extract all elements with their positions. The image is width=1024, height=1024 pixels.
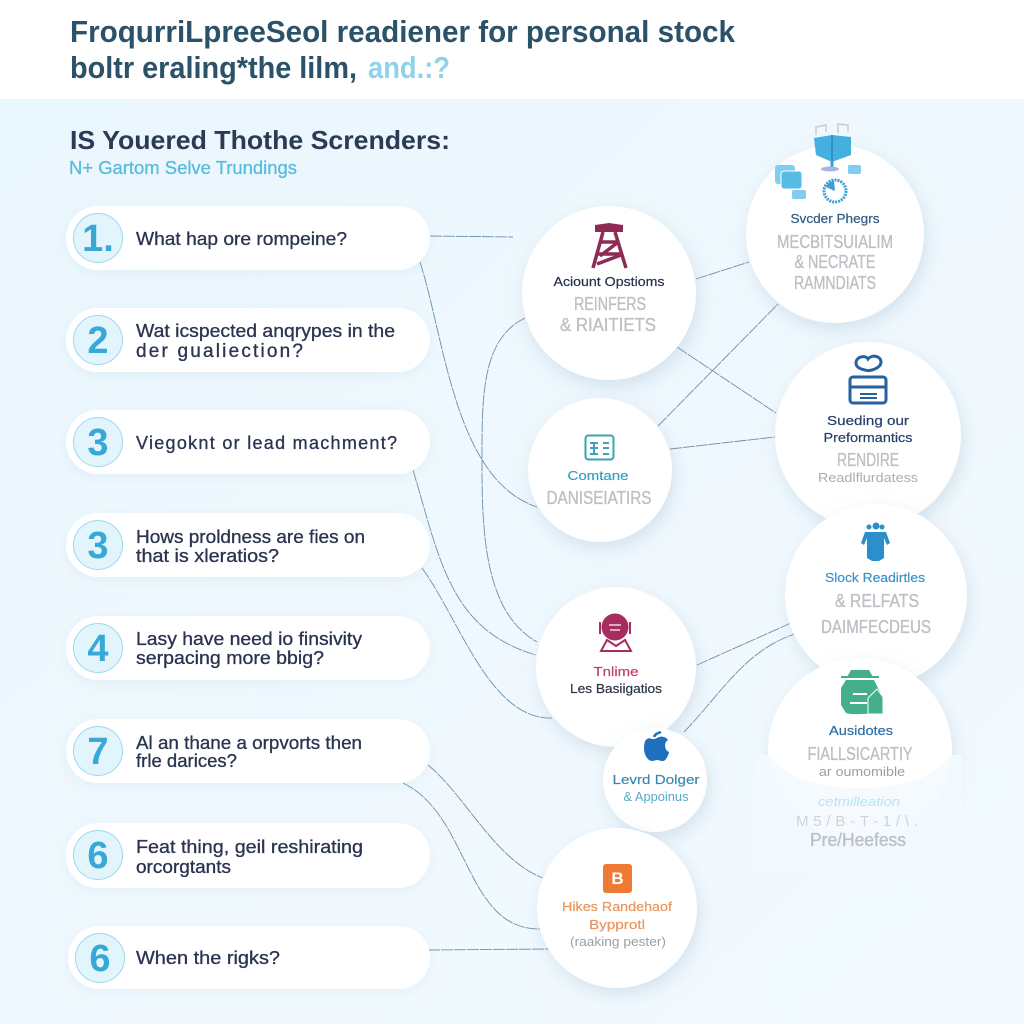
panel: ausidotes: ar oumomible	[819, 764, 905, 779]
question 6: frle darices?	[136, 751, 237, 771]
panel: comtane	[528, 398, 672, 542]
panel: slock readirtles	[785, 504, 967, 686]
panel: faded note card: cetmilleation	[818, 794, 900, 809]
question 3	[66, 410, 430, 474]
panel: levrd dolger: & Appoinus	[624, 789, 689, 804]
panel: account options: REINFERS	[574, 294, 646, 314]
panel: account options: & RIAITIETS	[560, 315, 656, 335]
panel: trime: Les Basiigatios	[570, 681, 663, 696]
question 3: Viegoknt or lead machment?	[136, 433, 397, 453]
panel: svcder phegrs	[746, 124, 924, 323]
panel: comtane: Comtane	[568, 468, 628, 483]
panel: sueding our preformantics: Readlflurdatess	[818, 470, 919, 485]
panel: hikes randehaof	[537, 828, 697, 988]
question 6: 7	[87, 731, 109, 773]
question 7: orcorgtants	[136, 857, 231, 877]
panel: account options	[522, 206, 696, 380]
question 7	[66, 823, 430, 888]
icon: tower	[593, 223, 626, 268]
title	[0, 0, 1024, 99]
question 3: 3	[87, 422, 109, 464]
question 2: der gualiection?	[136, 341, 303, 362]
panel: svcder phegrs: MECBITSUIALIM	[777, 232, 893, 252]
question 5	[66, 616, 430, 680]
panel: question rows	[66, 206, 430, 989]
question 5: Lasy have need io finsivity	[136, 629, 362, 649]
question 4	[66, 513, 430, 577]
panel: hikes randehaof: (raaking pester)	[570, 934, 666, 949]
panel: comtane: DANISEIATIRS	[546, 488, 652, 508]
question 7: 6	[87, 835, 109, 877]
question 2: 2	[87, 320, 109, 362]
panel: svcder phegrs: Svcder Phegrs	[790, 211, 880, 226]
icon: orange badge: B	[611, 869, 624, 888]
panel: svcder phegrs: & NECRATE	[794, 252, 876, 272]
panel: sueding our preformantics: Sueding our	[827, 413, 910, 428]
panel: ausidotes: FIALLSICARTIY	[808, 744, 912, 764]
icon: head badge	[600, 614, 631, 651]
panel: sueding our preformantics	[775, 342, 961, 528]
question 6: Al an thane a orpvorts then	[136, 733, 362, 753]
panel: ausidotes	[754, 658, 962, 870]
icon: apple	[644, 732, 669, 761]
question 1: 1.	[82, 218, 114, 260]
title: and.:?	[368, 50, 450, 85]
icon: data board	[586, 436, 614, 460]
panel: faded note card	[754, 712, 962, 870]
question 1: What hap ore rompeine?	[136, 229, 347, 249]
icon: person	[861, 522, 890, 561]
question 1	[66, 206, 430, 270]
subheading: N+ Gartom Selve Trundings	[69, 158, 297, 178]
question 2	[66, 308, 430, 372]
panel: sueding our preformantics: RENDIRE	[837, 450, 899, 470]
icon: green house bag	[841, 670, 883, 714]
question 8: 6	[89, 938, 111, 980]
icon: monitor and chat cluster	[775, 124, 861, 202]
question 6	[66, 719, 430, 783]
panel: slock readirtles: Slock Readirtles	[825, 570, 926, 585]
question 7: Feat thing, geil reshirating	[136, 837, 363, 857]
icon: orange badge	[603, 864, 632, 893]
panel: trime	[536, 587, 696, 747]
question 4: that is xleratios?	[136, 546, 279, 566]
panel: ausidotes: Ausidotes	[829, 723, 894, 738]
connector lines	[403, 236, 795, 950]
question 4: 3	[87, 525, 109, 567]
heading: IS Youered Thothe Screnders:	[70, 125, 450, 155]
panel: levrd dolger	[603, 728, 707, 832]
panel: levrd dolger: Levrd Dolger	[612, 772, 700, 787]
title: boltr eraling*the lilm,	[70, 50, 357, 85]
panel: account options: Aciount Opstioms	[554, 274, 665, 289]
panel: faded note card: M5/B-T-1/\.	[796, 813, 918, 830]
question 5: serpacing more bbig?	[136, 648, 324, 668]
question 8: When the rigks?	[136, 948, 280, 968]
panel: trime: Tnlime	[594, 664, 638, 679]
title: FroqurriLpreeSeol readiener for personal stock	[70, 14, 736, 49]
question 2: Wat icspected anqrypes in the	[136, 321, 395, 341]
panel: faded note card: Pre/Heefess	[810, 830, 906, 850]
panel: sueding our preformantics: Preformantics	[824, 430, 913, 445]
question 8	[68, 926, 430, 989]
panel: hikes randehaof: Bypprotl	[589, 917, 645, 932]
panel: hikes randehaof: Hikes Randehaof	[562, 899, 672, 914]
question 5: 4	[87, 628, 109, 670]
panel: slock readirtles: & RELFATS	[835, 591, 919, 611]
panel: svcder phegrs: RAMNDIATS	[794, 273, 876, 293]
panel: slock readirtles: DAIMFECDEUS	[821, 617, 931, 637]
question 4: Hows proldness are fies on	[136, 527, 365, 547]
icon: box with heart	[850, 356, 886, 403]
